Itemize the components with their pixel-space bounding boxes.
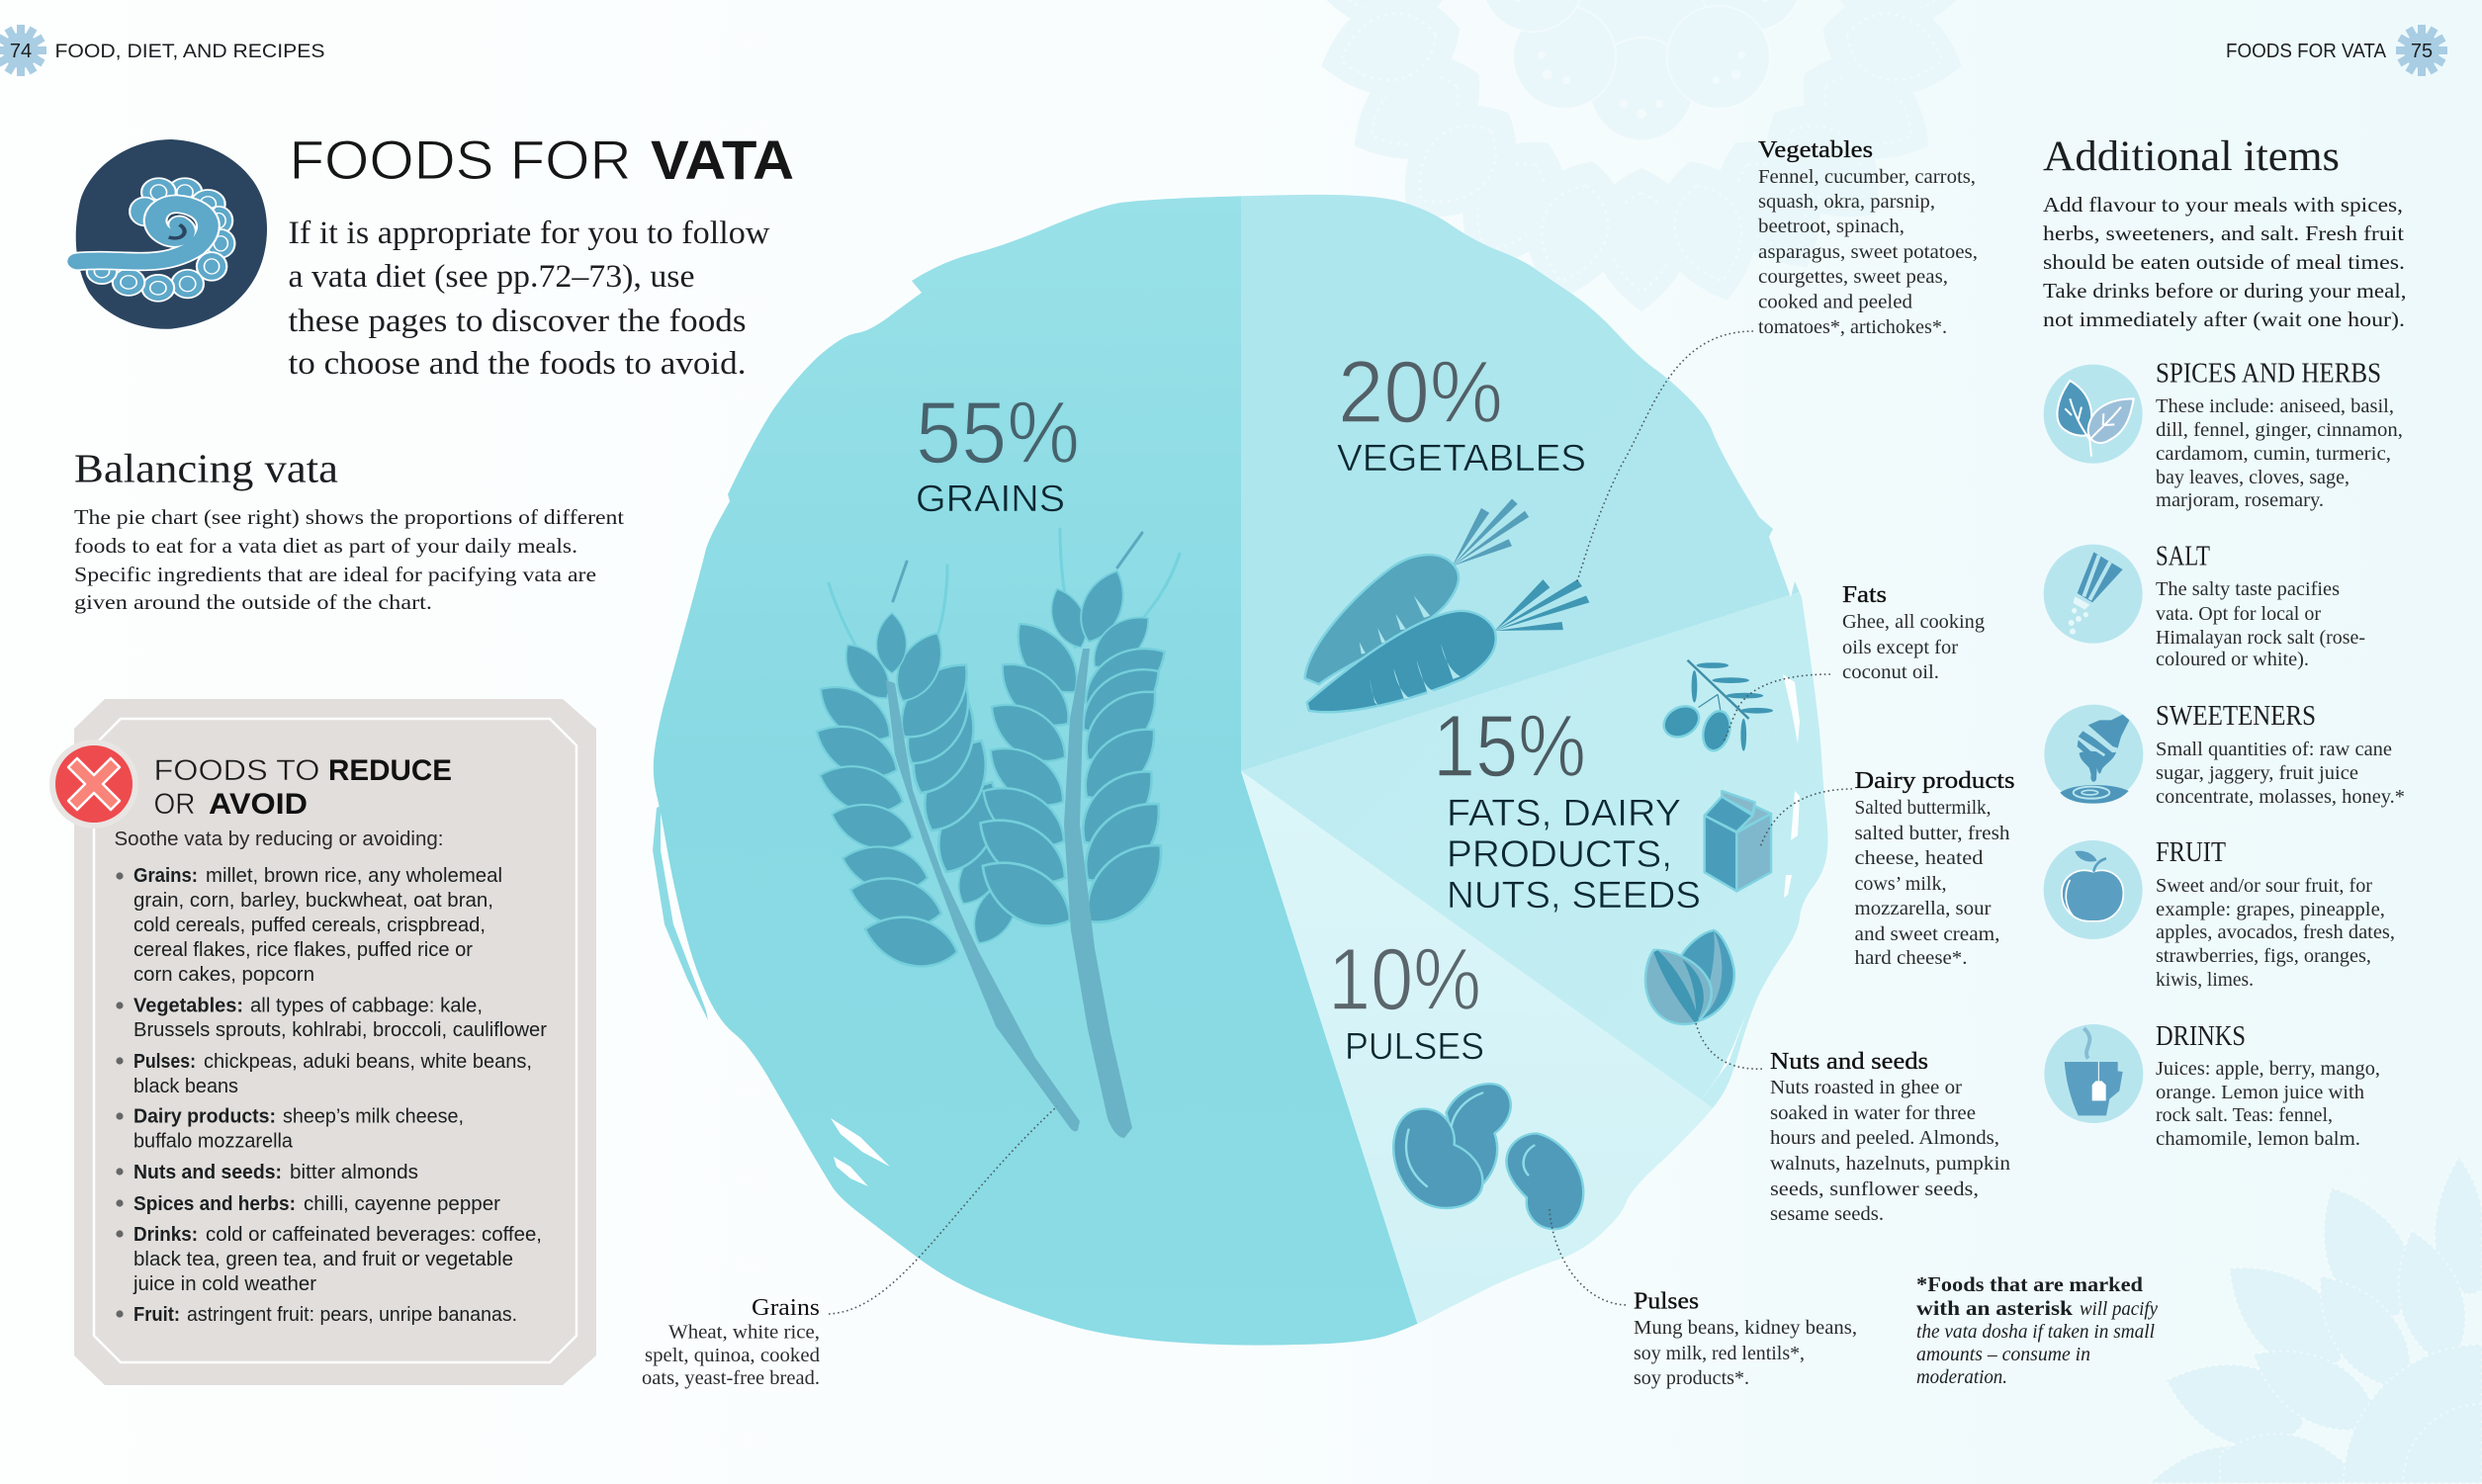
footnote: *Foods that are marked	[1916, 1272, 2143, 1296]
avoid list	[116, 864, 547, 1326]
blob edge details	[653, 674, 1800, 1186]
callout: fats: oils except for	[1842, 637, 1958, 658]
list item: dairy products: buffalo mozzarella	[133, 1129, 294, 1153]
item: drinks: rock salt. Teas: fennel,	[2156, 1104, 2333, 1126]
list bullets	[116, 872, 124, 1318]
item: spices and herbs: These include: aniseed, basil,	[2156, 395, 2394, 417]
list item: grains: cereal flakes, rice flakes, puffed rice or	[133, 938, 473, 961]
list item: fruit: astringent fruit: pears, unripe bananas.	[187, 1303, 517, 1326]
additional items paragraph: should be eaten outside of meal times.	[2043, 250, 2405, 274]
callout: pulses: Mung beans, kidney beans,	[1634, 1317, 1857, 1339]
callout: nuts and seeds: Nuts roasted in ghee or	[1770, 1077, 1962, 1098]
list item: nuts and seeds: bitter almonds	[290, 1161, 418, 1183]
icon: honey dipper	[2044, 705, 2143, 804]
list item: pulses: black beans	[133, 1075, 238, 1097]
pie segments	[653, 194, 1827, 1346]
list item: drinks: Drinks:	[133, 1223, 198, 1246]
right page header	[2226, 25, 2447, 76]
callout: pulses	[1634, 1289, 1857, 1389]
item: spices and herbs: marjoram, rosemary.	[2156, 489, 2324, 511]
label: 20% vegetables: 20%	[1338, 342, 1503, 441]
callout: dairy products: and sweet cream,	[1855, 923, 1999, 945]
list item: drinks	[133, 1223, 542, 1295]
list item: fruit: Fruit:	[133, 1303, 180, 1326]
list item: dairy products: Dairy products:	[133, 1105, 276, 1127]
callout: dairy products: Salted buttermilk,	[1855, 797, 1992, 819]
list item: vegetables: Brussels sprouts, kohlrabi, broccoli, cauliflower	[133, 1018, 547, 1041]
callout: vegetables: squash, okra, parsnip,	[1758, 191, 1935, 213]
list item: grains: millet, brown rice, any wholemeal	[206, 864, 502, 887]
intro text	[289, 216, 770, 382]
title: FOODS FOR	[289, 129, 631, 191]
callout: dairy products: cheese, heated	[1855, 847, 1984, 869]
page number badge 74	[0, 25, 46, 76]
list item: grains: corn cakes, popcorn	[133, 963, 314, 986]
list item: grains: Grains:	[133, 864, 198, 887]
callout: grains: Grains	[752, 1295, 820, 1321]
left page header	[0, 25, 324, 76]
item: salt: SALT	[2156, 542, 2210, 572]
item: fruit: strawberries, figs, oranges,	[2156, 945, 2371, 967]
list item: pulses: chickpeas, aduki beans, white beans,	[204, 1050, 532, 1073]
callout: vegetables: asparagus, sweet potatoes,	[1758, 241, 1978, 263]
callout: dairy products: salted butter, fresh	[1855, 823, 2009, 844]
list item: dairy products	[133, 1105, 464, 1153]
item: spices and herbs: bay leaves, cloves, sage,	[2156, 467, 2349, 488]
label: 55% grains: GRAINS	[916, 479, 1065, 520]
left wheat ear	[807, 613, 1080, 1131]
item: salt: coloured or white).	[2156, 649, 2309, 670]
list item: grains: cold cereals, puffed cereals, crispbread,	[133, 914, 486, 936]
footnote: with an asterisk	[1916, 1296, 2073, 1320]
item: spices and herbs: SPICES AND HERBS	[2156, 359, 2381, 390]
panel: foods to reduce or avoid	[49, 699, 596, 1385]
list item: drinks: cold or caffeinated beverages: coffee,	[206, 1223, 542, 1246]
intro text: to choose and the foods to avoid.	[289, 346, 746, 382]
item: fruit: Sweet and/or sour fruit, for	[2156, 875, 2372, 897]
item: drinks: chamomile, lemon balm.	[2156, 1128, 2360, 1150]
list item: nuts and seeds: Nuts and seeds:	[133, 1161, 282, 1183]
callout: vegetables: Vegetables	[1758, 137, 1873, 163]
title: VATA	[651, 129, 794, 191]
callout: nuts and seeds: walnuts, hazelnuts, pumpkin	[1770, 1153, 2010, 1175]
item: spices and herbs	[2044, 359, 2403, 511]
icon: carrots	[1305, 498, 1589, 712]
wheat awns	[829, 529, 1180, 690]
balancing vata paragraph	[74, 505, 624, 614]
list item: drinks: juice in cold weather	[133, 1272, 316, 1295]
callout: pulses: Pulses	[1634, 1289, 1699, 1315]
callout: dairy products: hard cheese*.	[1855, 947, 1968, 969]
additional items paragraph: herbs, sweeteners, and salt. Fresh fruit	[2043, 221, 2404, 245]
item: fruit: apples, avocados, fresh dates,	[2156, 921, 2395, 943]
callout: grains: Wheat, white rice,	[668, 1321, 820, 1343]
list item: vegetables: all types of cabbage: kale,	[250, 995, 483, 1016]
callout: nuts and seeds: soaked in water for three	[1770, 1102, 1976, 1124]
balancing vata section	[74, 445, 624, 614]
footnote: the vata dosha if taken in small	[1916, 1321, 2155, 1343]
heading: additional items: Additional items	[2043, 133, 2340, 180]
item: fruit: example: grapes, pineapple,	[2156, 899, 2385, 920]
icon: milk carton	[1705, 791, 1771, 891]
page number badge 75: 75	[2411, 41, 2433, 62]
item: spices and herbs: cardamom, cumin, turmeric,	[2156, 443, 2391, 465]
icon: beans	[1393, 1084, 1583, 1229]
footnote: moderation.	[1916, 1366, 2007, 1388]
callout: fats: Fats	[1842, 582, 1887, 608]
right wheat ear	[966, 564, 1179, 1138]
list item: vegetables	[133, 995, 547, 1041]
item: salt: Himalayan rock salt (rose-	[2156, 627, 2365, 649]
list item: nuts and seeds	[133, 1161, 418, 1183]
item: sweeteners: sugar, jaggery, fruit juice	[2156, 762, 2358, 784]
item: fruit: FRUIT	[2156, 837, 2226, 868]
icon: almonds	[1645, 930, 1734, 1024]
list item: spices and herbs: chilli, cayenne pepper	[304, 1192, 500, 1215]
item: sweeteners: concentrate, molasses, honey.*	[2156, 786, 2405, 808]
item: sweeteners: SWEETENERS	[2156, 701, 2316, 732]
label: 20% vegetables: VEGETABLES	[1337, 438, 1586, 480]
intro text: these pages to discover the foods	[289, 304, 746, 339]
callout: vegetables: courgettes, sweet peas,	[1758, 266, 1948, 288]
page number badge 74: 74	[10, 41, 32, 62]
additional items section	[2043, 133, 2407, 1150]
decorative mandala: top	[1308, 0, 1975, 313]
list item: spices and herbs: Spices and herbs:	[133, 1192, 296, 1215]
item: salt: The salty taste pacifies	[2156, 578, 2340, 600]
title	[289, 129, 794, 191]
panel intro line: Soothe vata by reducing or avoiding:	[115, 828, 443, 850]
callout: pulses: soy products*.	[1634, 1367, 1749, 1389]
icon: leaves	[2044, 365, 2143, 464]
callout: vegetables: cooked and peeled	[1758, 291, 1912, 312]
callout: dairy products: Dairy products	[1855, 768, 2015, 794]
item: drinks: Juices: apple, berry, mango,	[2156, 1058, 2380, 1080]
item: drinks: DRINKS	[2156, 1021, 2246, 1052]
icon: salt shaker	[2044, 545, 2143, 644]
footnote: will pacify	[2080, 1298, 2158, 1320]
label: 15% fats dairy products nuts seeds: PRODUCTS,	[1447, 834, 1672, 876]
panel heading	[154, 754, 452, 821]
callout: dairy products: mozzarella, sour	[1855, 898, 1992, 919]
running head left: FOOD, DIET, AND RECIPES	[55, 41, 324, 62]
pie chart	[653, 194, 1852, 1346]
list item: pulses	[133, 1050, 532, 1097]
additional items paragraph: not immediately after (wait one hour).	[2043, 307, 2405, 331]
intro text: If it is appropriate for you to follow	[289, 216, 770, 251]
item: fruit: kiwis, limes.	[2156, 969, 2254, 991]
additional items paragraph: Take drinks before or during your meal,	[2043, 279, 2407, 303]
item: spices and herbs: dill, fennel, ginger, cinnamon,	[2156, 419, 2403, 441]
callout: grains: oats, yeast-free bread.	[642, 1367, 820, 1389]
callout: nuts and seeds: hours and peeled. Almonds,	[1770, 1127, 1999, 1149]
item: fruit	[2044, 837, 2395, 991]
label: 55% grains: 55%	[916, 383, 1080, 481]
callout: pulses: soy milk, red lentils*,	[1634, 1343, 1805, 1364]
callout: fats: Ghee, all cooking	[1842, 611, 1985, 633]
callout: nuts and seeds: Nuts and seeds	[1770, 1049, 1928, 1075]
callout: nuts and seeds	[1770, 1049, 2010, 1225]
callout: grains: spelt, quinoa, cooked	[645, 1345, 820, 1366]
additional items paragraph	[2043, 193, 2407, 331]
callout: vegetables: tomatoes*, artichokes*.	[1758, 316, 1947, 338]
callout: nuts and seeds: seeds, sunflower seeds,	[1770, 1178, 1979, 1200]
list item: drinks: black tea, green tea, and fruit or vegetable	[133, 1248, 513, 1270]
footnote	[1916, 1272, 2158, 1388]
additional items paragraph: Add flavour to your meals with spices,	[2043, 193, 2403, 217]
label: 15% fats dairy products nuts seeds: NUTS, SEEDS	[1447, 875, 1701, 917]
label: 10% pulses	[1328, 929, 1484, 1068]
callout: vegetables: beetroot, spinach,	[1758, 216, 1905, 237]
icon: tea cup	[2044, 1024, 2143, 1123]
label: 10% pulses: 10%	[1328, 929, 1481, 1028]
list item: vegetables: Vegetables:	[133, 995, 243, 1016]
panel heading: FOODS TO	[154, 754, 320, 787]
list item: pulses: Pulses:	[133, 1050, 196, 1073]
list item: dairy products: sheep’s milk cheese,	[283, 1105, 464, 1127]
item: salt	[2044, 542, 2365, 670]
callout: grains	[642, 1295, 820, 1389]
intro text: a vata diet (see pp.72–73), use	[289, 259, 694, 295]
callout: dairy products	[1855, 768, 2015, 969]
callout: vegetables: Fennel, cucumber, carrots,	[1758, 166, 1976, 188]
callout: vegetables	[1758, 137, 1978, 338]
icon: olives	[1658, 660, 1773, 753]
balancing vata paragraph: foods to eat for a vata diet as part of your daily meals.	[74, 534, 577, 558]
list item: grains	[133, 864, 502, 986]
heading: balancing vata: Balancing vata	[74, 445, 338, 490]
callout: nuts and seeds: sesame seeds.	[1770, 1203, 1884, 1225]
panel heading: REDUCE	[328, 754, 452, 787]
wheat illustration	[807, 529, 1180, 1138]
callout: fats	[1842, 582, 1985, 683]
list item: spices and herbs	[133, 1192, 500, 1215]
item: sweeteners	[2044, 701, 2405, 808]
label: 55% grains	[916, 383, 1080, 520]
label: 10% pulses: PULSES	[1345, 1026, 1484, 1068]
panel heading: AVOID	[209, 788, 308, 821]
running head right: FOODS FOR VATA	[2226, 41, 2387, 62]
callout: fats: coconut oil.	[1842, 661, 1939, 683]
label: 15% fats dairy products nuts seeds	[1433, 696, 1701, 917]
label: 20% vegetables	[1337, 342, 1586, 480]
panel heading: OR	[154, 788, 196, 821]
item: sweeteners: Small quantities of: raw cane	[2156, 739, 2392, 760]
list item: grains: grain, corn, barley, buckwheat, oat bran,	[133, 889, 493, 912]
balancing vata paragraph: Specific ingredients that are ideal for pacifying vata are	[74, 563, 596, 586]
label: 15% fats dairy products nuts seeds: FATS, DAIRY	[1447, 793, 1681, 834]
leader lines	[829, 331, 1852, 1314]
icon: vata swirl logo	[76, 139, 267, 329]
footnote: amounts – consume in	[1916, 1344, 2090, 1365]
item: drinks	[2044, 1021, 2380, 1150]
item: salt: vata. Opt for local or	[2156, 603, 2321, 625]
decorative mandala: bottom right	[2151, 1157, 2482, 1483]
balancing vata paragraph: The pie chart (see right) shows the proportions of different	[74, 505, 624, 529]
icon: apple	[2044, 840, 2143, 939]
page number badge 75	[2396, 25, 2447, 76]
callout: dairy products: cows’ milk,	[1855, 873, 1946, 895]
balancing vata paragraph: given around the outside of the chart.	[74, 590, 432, 614]
item: drinks: orange. Lemon juice with	[2156, 1082, 2364, 1103]
icon: red cross	[49, 740, 138, 829]
label: 15% fats dairy products nuts seeds: 15%	[1433, 696, 1586, 795]
